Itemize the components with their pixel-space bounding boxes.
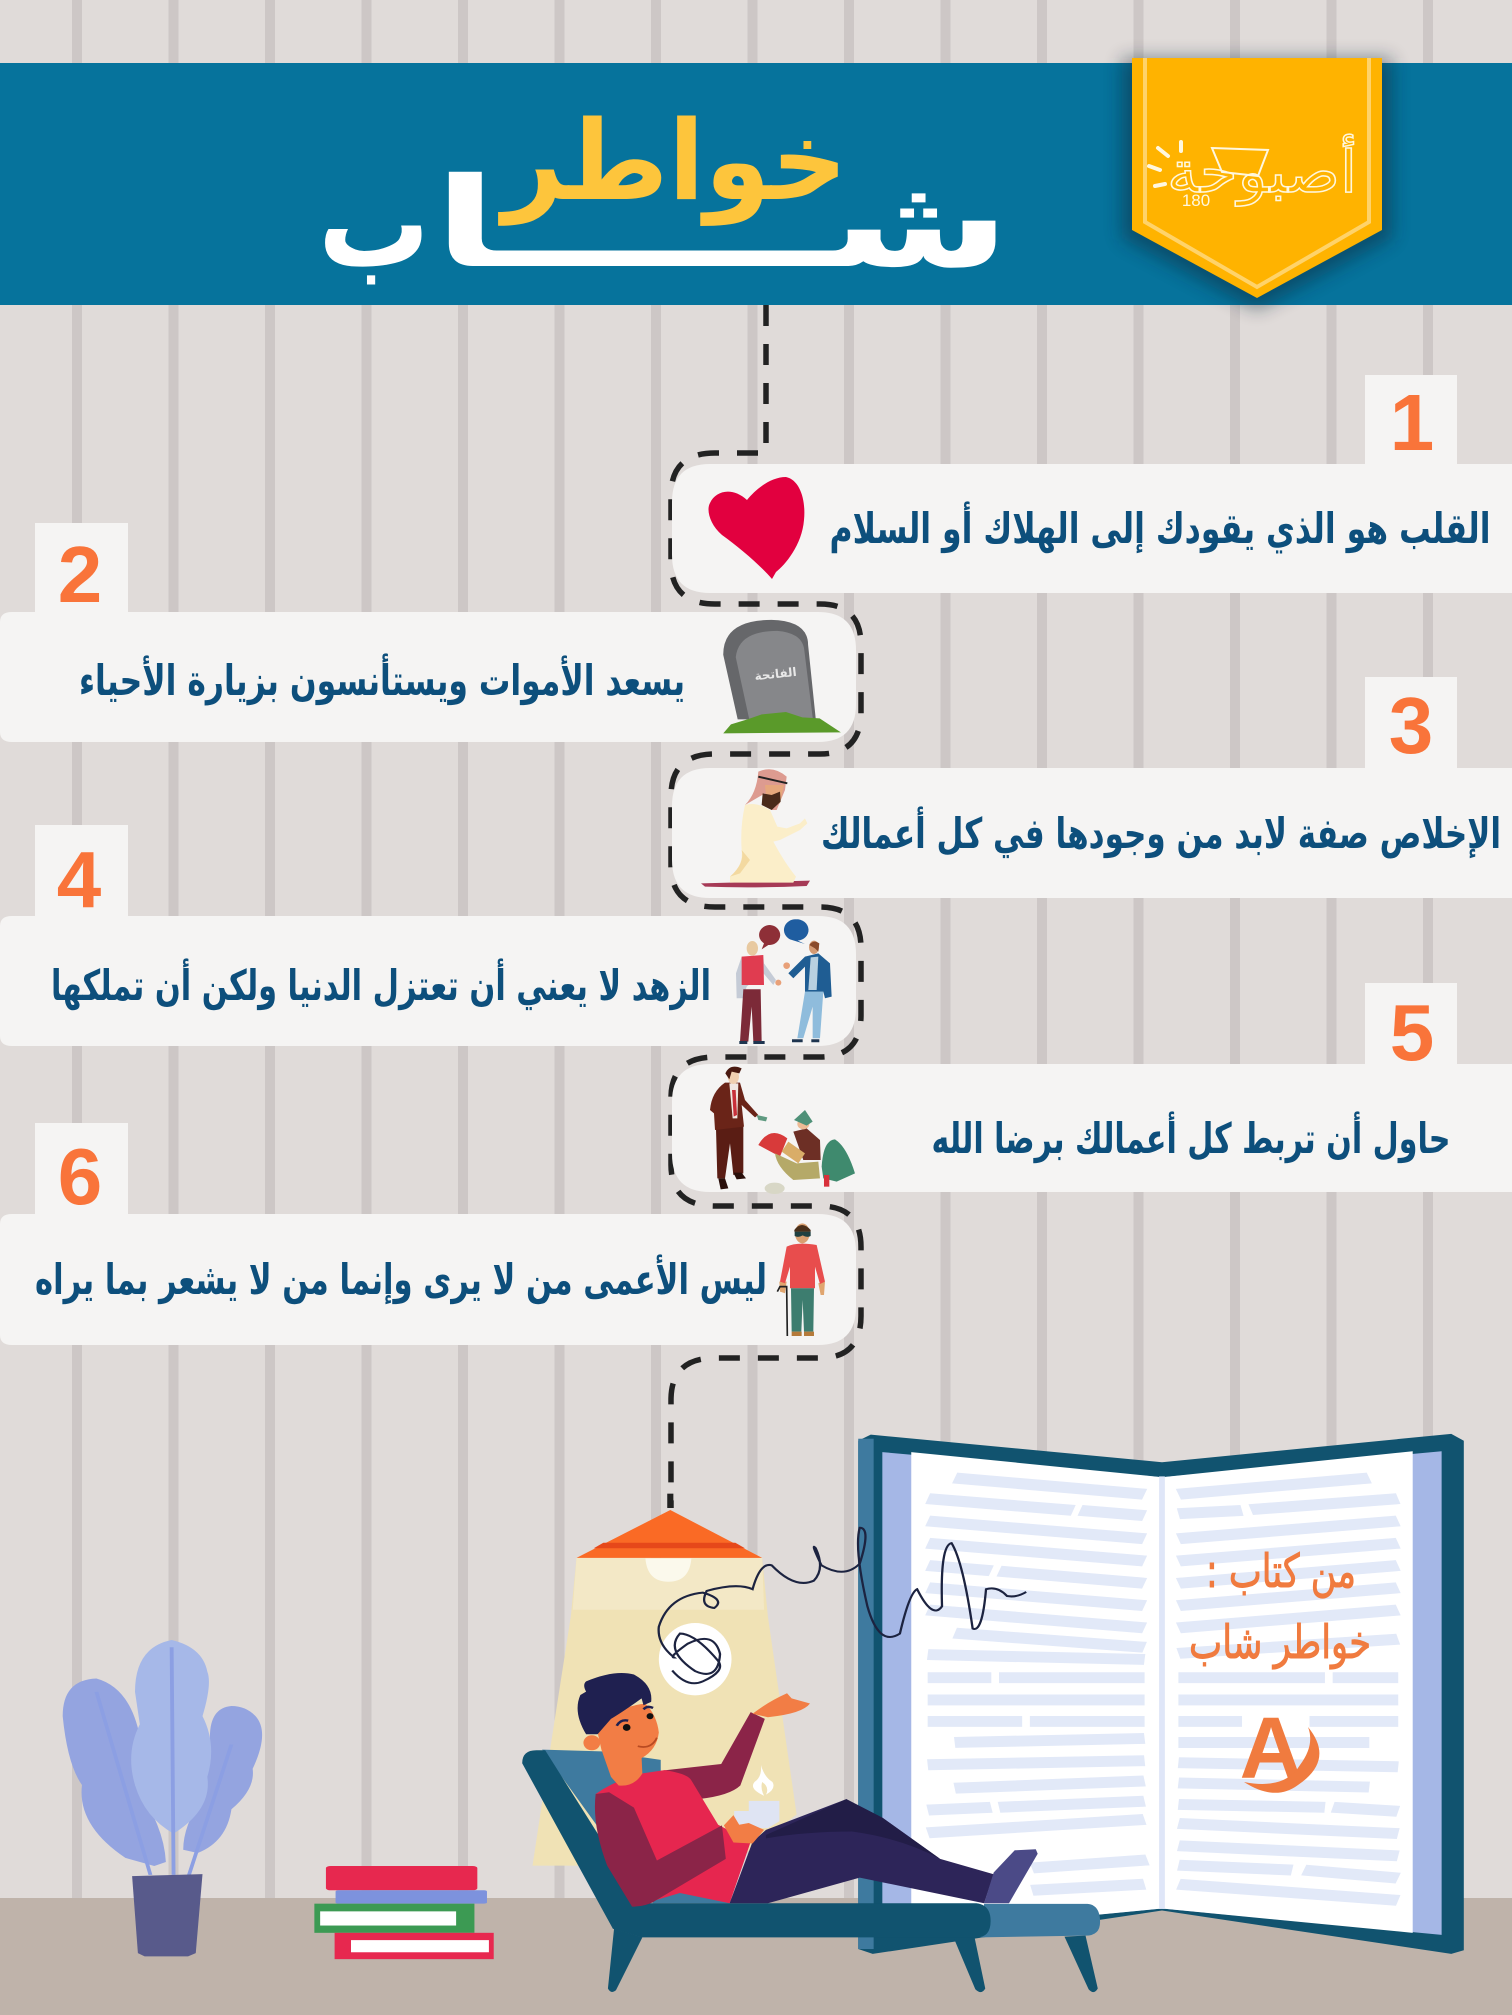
beggar hat [794,1110,813,1126]
floor [0,1898,1512,2015]
item 5 [672,983,1512,1194]
speech bubbles [759,925,780,949]
pill 5 [672,1064,1512,1192]
caption line 1: من كتاب : [1206,1544,1356,1599]
beggar face [797,1119,809,1129]
neck and head [795,1223,810,1243]
item 4 [0,825,856,1046]
stack of books [314,1866,494,1959]
lampshade [577,1510,762,1558]
foot [984,1849,1038,1903]
thought circle [659,1623,732,1695]
right man shirt [808,957,818,990]
businessman shoes [718,1173,746,1189]
pill 1 [672,464,1512,593]
icon: two men talking [736,919,832,1044]
rear arm [661,1712,765,1799]
title: shab: شـــــا [433,152,1011,296]
text 2: يسعد الأموات ويستأنسون بزيارة الأحياء [79,653,685,706]
book caption [1189,1544,1371,1670]
number tab 5 [1365,983,1457,1072]
right man hair [809,942,819,952]
number tab 2 [35,523,128,618]
cane [777,1287,787,1336]
raised hand [753,1693,810,1717]
dashed connector path [671,305,861,1508]
glasses [795,1232,811,1237]
trousers [791,1288,814,1332]
vase [132,1874,203,1956]
cup [734,1801,779,1828]
businessman shirt and tie [729,1083,738,1118]
businessman trousers [716,1126,743,1178]
large open book [858,1434,1464,1954]
book text lines right [1178,1478,1398,1900]
chaise frame [522,1750,991,1937]
caption line 2: خواطر شاب [1189,1615,1371,1670]
icon: praying man [701,769,810,887]
title: shab: ب [318,152,430,296]
book text lines left [928,1478,1148,1890]
icon: man giving to beggar [710,1067,855,1194]
neck and face [598,1704,659,1786]
right man hand [783,962,790,969]
title: khawater: خواطر [498,97,848,226]
number 2: 2 [58,530,102,619]
hands [779,1282,825,1295]
icon: tombstone [723,620,841,733]
light beam [533,1558,797,1866]
left man sleeves [736,957,776,998]
robe shade [730,850,750,877]
lamp cord [667,1494,673,1508]
red bag [758,1133,787,1157]
number 6: 6 [58,1132,102,1221]
logo swoosh [1244,1727,1319,1793]
tombstone label: الفاتحة [754,665,797,683]
cup steam [753,1765,774,1796]
pill 4 [0,916,856,1046]
pill 6 [0,1214,856,1345]
number tab 6 [35,1123,128,1218]
number 4: 4 [57,835,102,924]
grass [723,712,841,733]
left man head [747,941,758,956]
money [757,1115,767,1121]
pill 2 [0,612,856,742]
item 1 [672,375,1512,593]
number 1: 1 [1390,378,1434,467]
beggar legs [775,1153,820,1180]
left man trousers [740,989,762,1042]
upper leg shadow [766,1799,940,1859]
number tab 1 [1365,375,1457,470]
ribbon logo [1122,58,1392,310]
logo wordmark: أصبوحة [1167,134,1357,207]
left man vest [742,955,764,985]
left man hands [775,980,781,986]
shoes [739,1039,819,1044]
logo rays [1149,142,1181,186]
pill 3 [672,768,1512,898]
text 4: الزهد لا يعني أن تعتزل الدنيا ولكن أن تملكها [51,958,711,1011]
right man head [809,941,819,954]
keffiyeh [745,769,787,810]
coin plate [765,1183,785,1194]
lamp with light beam [533,1494,797,1866]
tangled thought wire [659,1528,1026,1683]
face [765,785,784,803]
agal [758,777,787,783]
mouth [638,1738,657,1747]
reclining man on chaise [522,1673,1100,1992]
businessman suit [710,1083,758,1130]
text 6: ليس الأعمى من لا يرى وإنما من لا يشعر بما يراه [35,1254,767,1305]
trousers [730,1799,994,1903]
plant [63,1640,262,1956]
shoes [792,1332,814,1336]
hair [794,1225,811,1232]
sweater [780,1244,825,1288]
cardboard sign [782,1142,805,1163]
header banner [0,63,1512,305]
ear [583,1735,600,1750]
torso [596,1770,751,1907]
logo letter: A [1240,1700,1302,1797]
businessman hair [725,1067,742,1079]
front arm [595,1792,726,1907]
icon: blind man [777,1223,825,1336]
bulb [645,1558,691,1582]
item 6 [0,1123,856,1345]
hair [578,1673,651,1734]
businessman head [728,1069,739,1084]
robe [730,804,807,883]
item 2 [0,523,856,742]
red can [824,1175,829,1187]
right man jacket [788,953,832,998]
title: shab [318,152,1011,296]
chaise back cushion [542,1750,730,1903]
logo number: 180 [1182,191,1210,210]
logo crown [1212,148,1268,176]
hand holding cup [724,1815,764,1843]
number tab 3 [1365,677,1457,772]
beggar sweater [793,1128,821,1160]
publisher logo [1240,1700,1319,1797]
leaves [63,1678,166,1866]
beard [762,792,781,810]
chaise footrest [980,1904,1100,1937]
icon: heart [708,477,804,579]
chaise legs [608,1929,1098,1992]
eyes [617,1707,653,1726]
number 3: 3 [1389,681,1433,770]
number tab 4 [35,825,128,920]
item 3 [672,677,1512,898]
right man trousers [797,992,823,1038]
number 5: 5 [1390,988,1434,1077]
backpack [822,1139,855,1182]
prayer rug [701,881,810,887]
